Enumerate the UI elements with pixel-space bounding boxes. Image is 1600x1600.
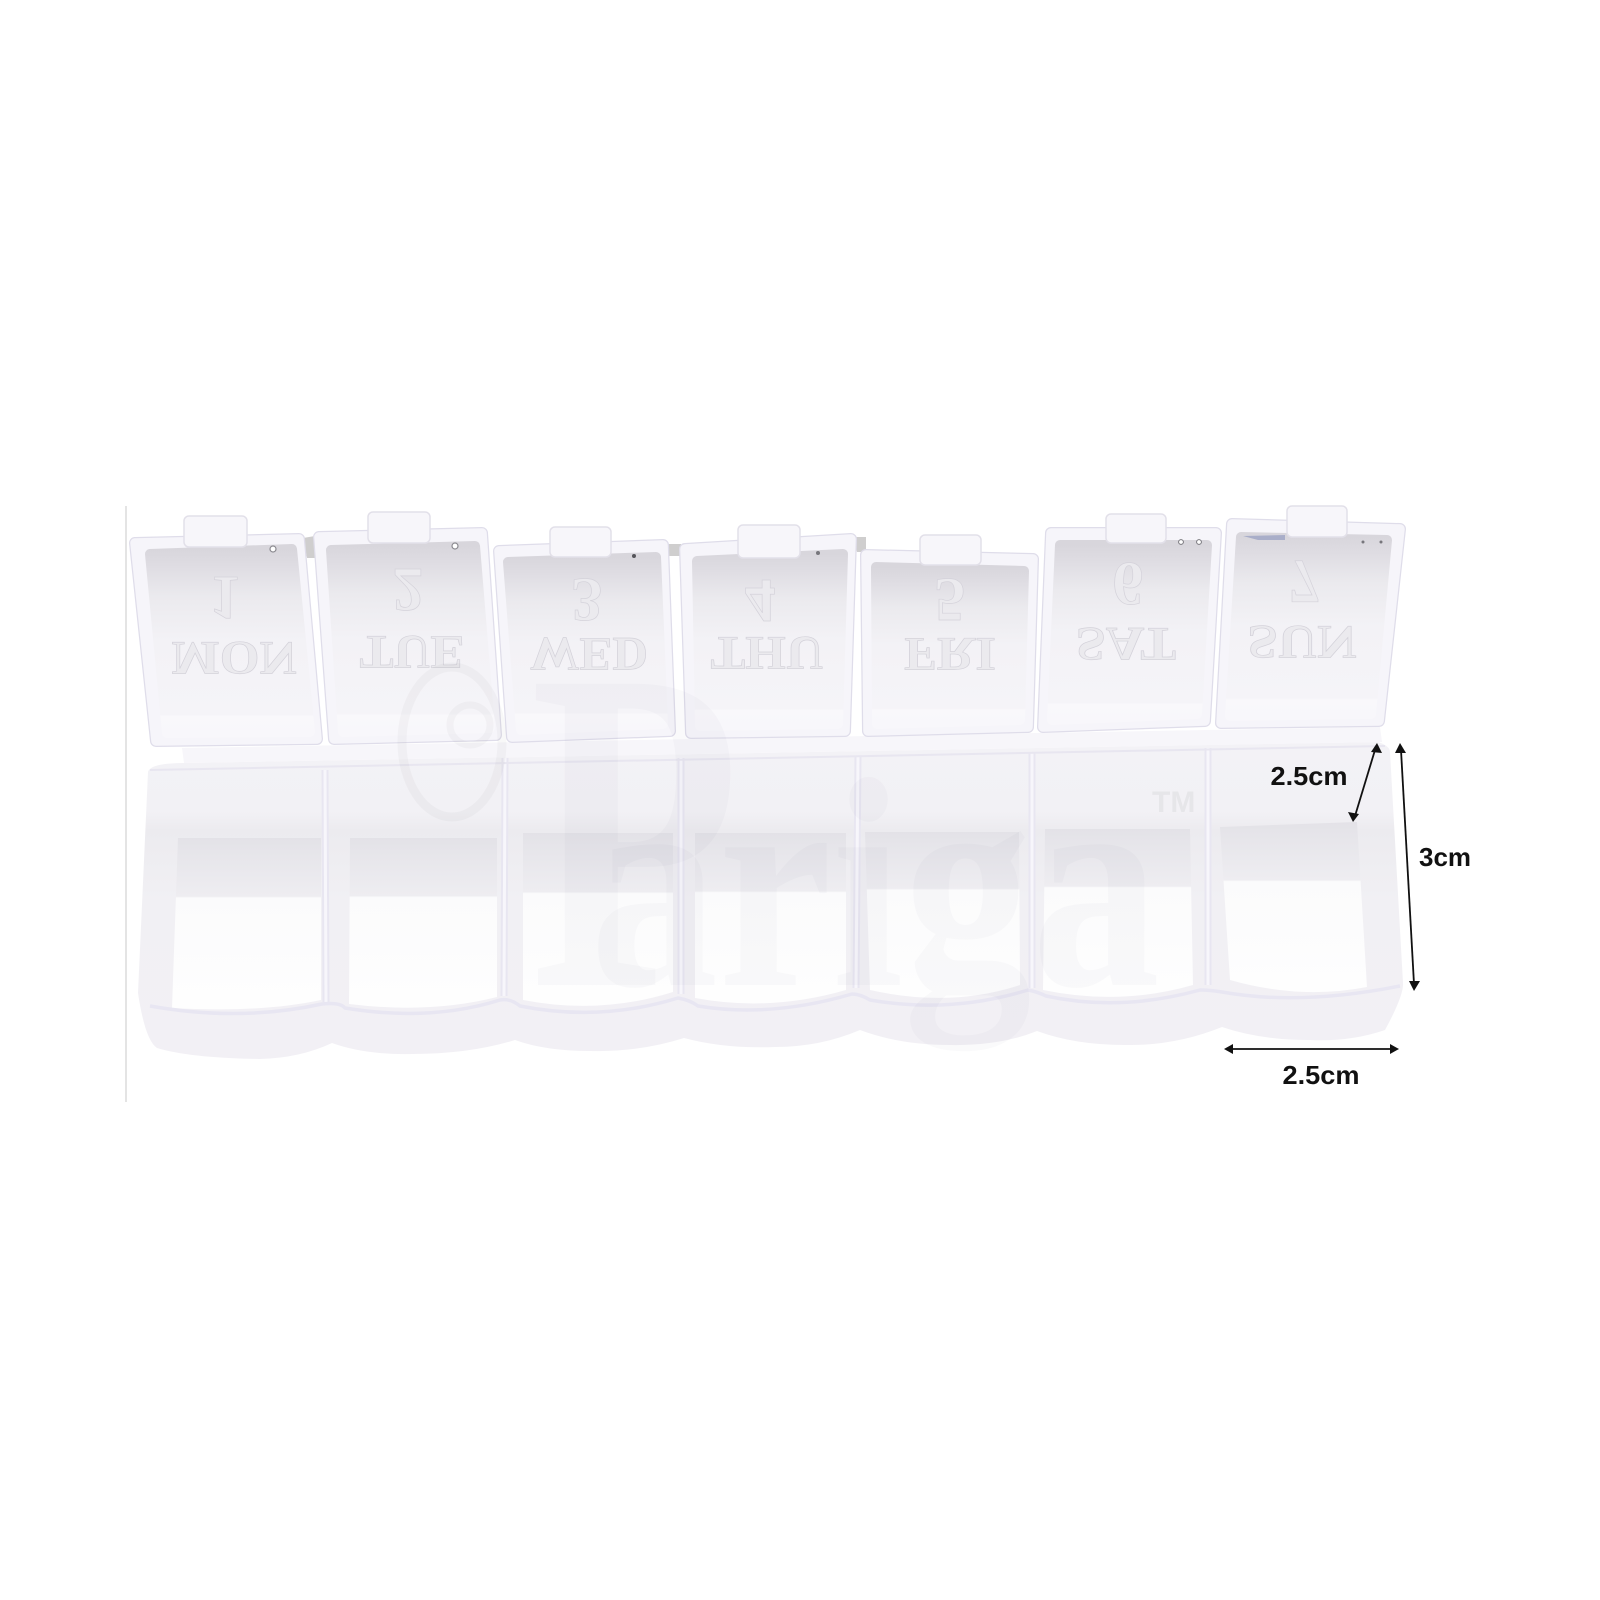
front lip line	[150, 986, 1400, 1014]
label: width 2.5cm: 2.5cm	[1282, 1060, 1360, 1090]
lid 2: TUE: 2	[392, 555, 424, 623]
lid 7: SUN: SUN	[1248, 615, 1357, 668]
lid 3: WED	[499, 527, 670, 737]
gaps behind lids	[303, 536, 866, 558]
compartment floors	[172, 822, 1367, 1009]
watermark: TM	[1152, 786, 1195, 819]
lid 6: SAT	[1043, 514, 1216, 727]
lid 2: TUE	[319, 512, 496, 739]
lid 6: SAT: 6	[1112, 549, 1144, 617]
lid 4: THU: 4	[744, 566, 776, 634]
watermark: P	[530, 575, 740, 1085]
lid 3: WED: WED	[530, 627, 648, 680]
watermark	[402, 575, 1195, 1085]
left edge line	[125, 506, 127, 1102]
watermark: ariga	[590, 718, 1160, 1055]
lid 1: MON	[135, 516, 317, 741]
lid 4: THU: THU	[710, 626, 824, 679]
hinge strip	[182, 727, 1382, 763]
label: depth 2.5cm: 2.5cm	[1270, 761, 1348, 791]
lid 4: THU	[685, 525, 851, 733]
lid 6: SAT: SAT	[1076, 617, 1176, 670]
arrow: width	[1224, 1044, 1399, 1054]
lid 7: SUN: 7	[1288, 547, 1320, 615]
compartment dividers	[325, 748, 1208, 1002]
lid 5: FRI: FRI	[904, 627, 996, 680]
pill box base tray	[138, 742, 1403, 1059]
lid 1: MON: 1	[210, 563, 240, 631]
lid 3: WED: 3	[572, 565, 602, 633]
lid 1: MON: MON	[172, 631, 297, 684]
arrow: compartment depth	[1348, 743, 1382, 822]
lid 2: TUE: TUE	[359, 625, 465, 678]
label: height 3cm: 3cm	[1419, 842, 1471, 872]
lid 5: FRI	[866, 535, 1033, 731]
lid 7: SUN	[1221, 506, 1400, 723]
lid 5: FRI: 5	[934, 565, 966, 633]
arrow: height	[1395, 743, 1420, 991]
top rim line	[150, 746, 1385, 770]
